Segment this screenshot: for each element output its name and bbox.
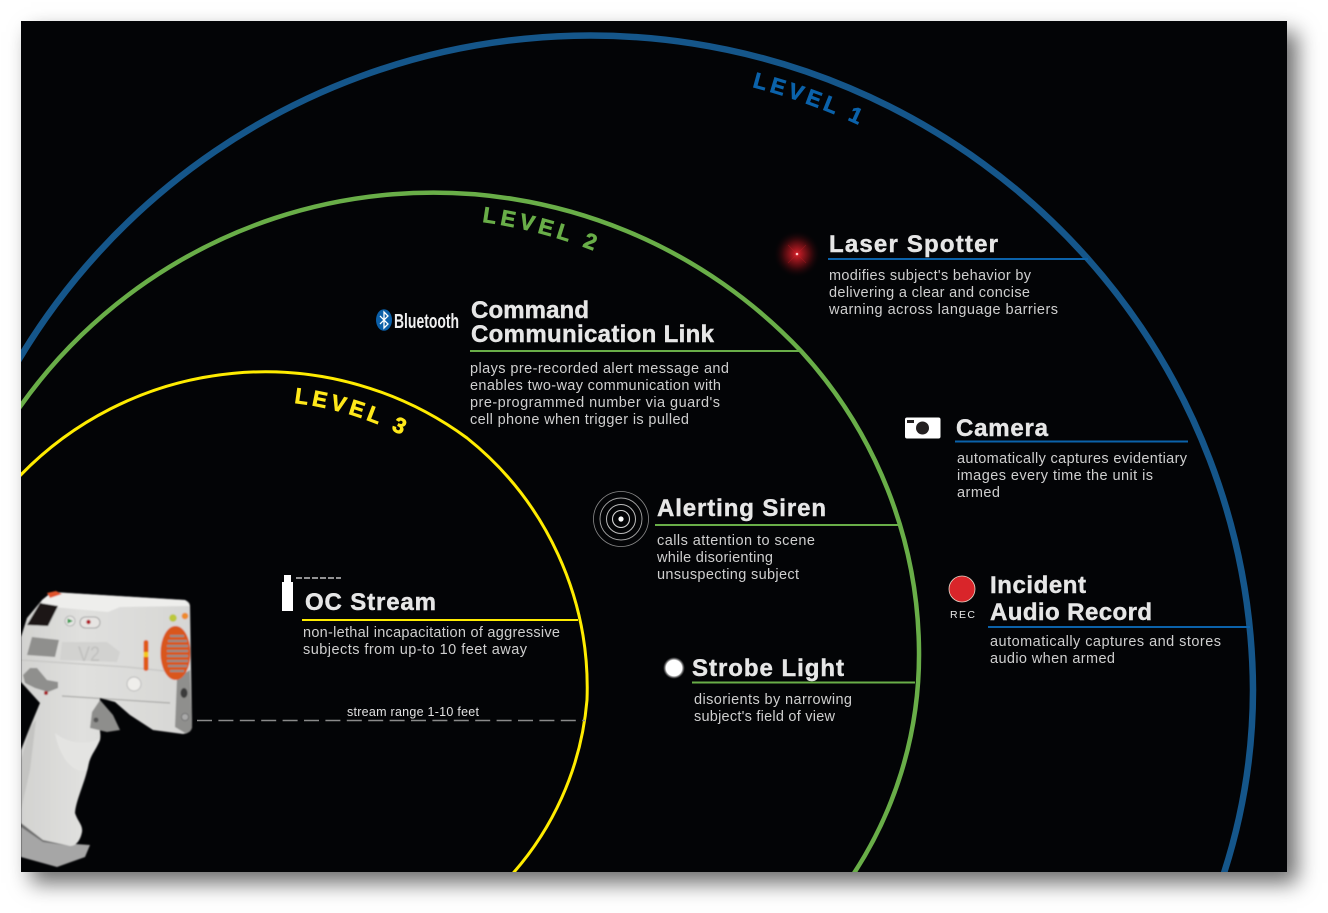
ring: level 2 <box>15 193 919 885</box>
block: Command Communication Link <box>470 297 801 428</box>
label: level 1: LEVEL 1 <box>753 72 862 125</box>
label: level 2: LEVEL 2 <box>483 206 597 251</box>
block: Laser Spotter: warning across language barriers <box>828 302 1058 318</box>
icon: OC canister <box>282 575 341 611</box>
stream range line <box>197 720 585 722</box>
block: Command Communication Link: enables two-way communication with <box>470 378 721 394</box>
block: Incident Audio Record: audio when armed <box>990 651 1115 667</box>
icon: record button <box>949 576 975 621</box>
block: Laser Spotter: delivering a clear and concise <box>829 285 1030 301</box>
icon: strobe light <box>663 657 685 679</box>
icon: camera <box>905 418 940 438</box>
ring: level 3 <box>15 372 587 882</box>
icon: siren rings <box>594 492 648 546</box>
block: Strobe Light: subject's field of view <box>694 709 836 725</box>
block: Camera <box>955 415 1188 501</box>
block: OC Stream: non-lethal incapacitation of aggressive <box>303 625 560 641</box>
icon: bluetooth logo <box>376 309 459 333</box>
block: Alerting Siren: unsuspecting subject <box>657 567 799 583</box>
block: Camera: armed <box>957 485 1000 501</box>
block: OC Stream <box>302 589 578 658</box>
block: Command Communication Link: cell phone when trigger is pulled <box>470 412 689 428</box>
block: Command Communication Link: plays pre-recorded alert message and <box>470 361 729 377</box>
block: Incident Audio Record: automatically captures and stores <box>990 634 1221 650</box>
stream range label: stream range 1-10 feet <box>347 705 480 719</box>
block: Incident Audio Record: Audio Record <box>990 599 1152 626</box>
block: Laser Spotter: Laser Spotter <box>829 231 998 258</box>
block: Camera: Camera <box>956 415 1049 442</box>
icon: laser glow <box>776 234 817 274</box>
block: Alerting Siren: Alerting Siren <box>657 495 826 522</box>
block: Alerting Siren: calls attention to scene <box>657 533 815 549</box>
icon: bluetooth logo: Bluetooth <box>394 311 459 333</box>
block: Strobe Light: disorients by narrowing <box>694 692 852 708</box>
block: Incident Audio Record: Incident <box>990 572 1086 599</box>
label: level 3: LEVEL 3 <box>295 388 406 434</box>
block: Strobe Light <box>692 655 915 725</box>
block: Camera: images every time the unit is <box>957 468 1153 484</box>
block: Alerting Siren: while disorienting <box>656 550 773 566</box>
device: pepper spray unit: V2 <box>78 643 100 666</box>
block: Laser Spotter <box>828 231 1088 318</box>
icon: record button: REC <box>950 609 975 621</box>
block: Command Communication Link: Command <box>471 297 589 324</box>
block: Laser Spotter: modifies subject's behavior by <box>829 268 1032 284</box>
block: Alerting Siren <box>655 495 900 583</box>
block: OC Stream: OC Stream <box>305 589 436 616</box>
block: Command Communication Link: pre-programmed number via guard's <box>470 395 720 411</box>
block: Incident Audio Record <box>988 572 1250 667</box>
block: OC Stream: subjects from up-to 10 feet away <box>303 642 528 658</box>
block: Camera: automatically captures evidentiary <box>957 451 1188 467</box>
block: Strobe Light: Strobe Light <box>692 655 844 682</box>
block: Command Communication Link: Communication Link <box>471 321 715 348</box>
device: pepper spray unit <box>21 591 192 867</box>
